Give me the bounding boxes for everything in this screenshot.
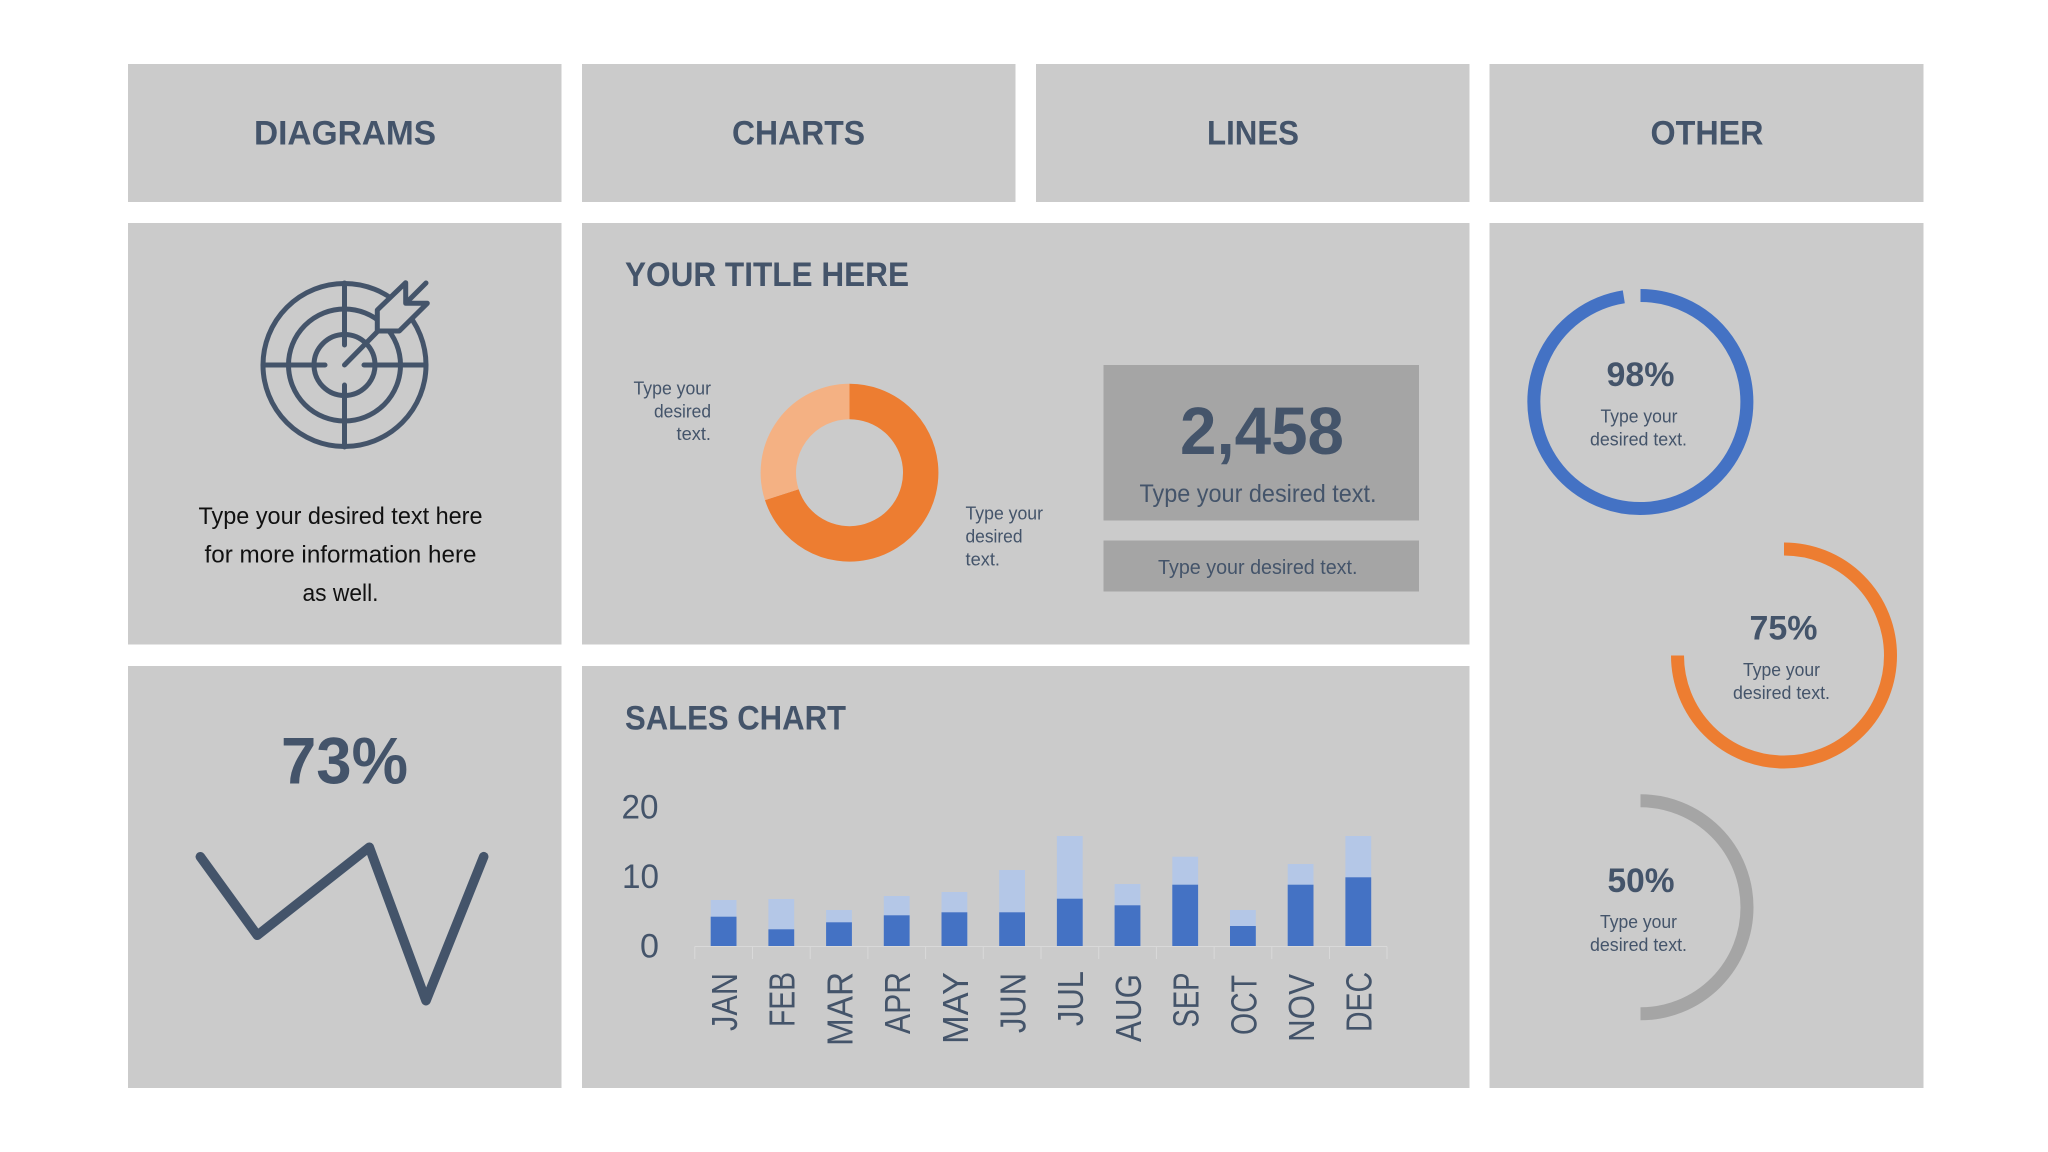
donut label: right: Type your <box>966 502 1043 524</box>
stat box: 2,458: Type your desired text. <box>1140 480 1376 508</box>
header: diagrams <box>128 64 562 202</box>
header: lines <box>1036 64 1470 202</box>
donut label: left <box>634 378 711 444</box>
x axis month labels <box>704 971 1380 1046</box>
header: lines: LINES <box>1207 114 1299 152</box>
x axis month labels: AUG <box>1108 974 1149 1042</box>
ring: 75% <box>1678 549 1890 762</box>
ring: 75%: 75% <box>1750 610 1818 648</box>
header: diagrams: DIAGRAMS <box>254 114 436 152</box>
panel: sales chart <box>582 666 1470 1088</box>
ring: 75%: desired text. <box>1733 682 1830 703</box>
metric: 73%: 73% <box>281 724 408 798</box>
stacked bar chart <box>695 836 1387 959</box>
donut label: right: text. <box>966 548 1000 570</box>
text block: target description: for more information here <box>204 542 476 568</box>
panel: 73% line <box>128 666 562 1088</box>
x axis month labels: FEB <box>762 972 803 1027</box>
x axis month labels: JUL <box>1050 971 1091 1026</box>
y axis labels: 10 <box>622 858 659 896</box>
header: charts <box>582 64 1016 202</box>
header: charts: CHARTS <box>732 114 865 152</box>
stat box: 2,458 <box>1104 365 1419 520</box>
x axis month labels: JUN <box>992 973 1034 1033</box>
text block: target description: Type your desired text here <box>198 503 482 530</box>
text block: target description: as well. <box>302 580 378 607</box>
header: other <box>1490 64 1924 202</box>
panel: target diagram <box>128 223 562 644</box>
x axis month labels: DEC <box>1339 972 1380 1032</box>
donut label: left: text. <box>676 423 711 444</box>
x axis month labels: NOV <box>1281 974 1322 1042</box>
ring: 98%: desired text. <box>1590 428 1687 450</box>
stat box: caption <box>1104 540 1419 592</box>
x axis month labels: SEP <box>1166 972 1207 1028</box>
donut label: right <box>966 502 1043 570</box>
stat box: caption: Type your desired text. <box>1158 556 1358 579</box>
panel: progress rings <box>1490 223 1924 1088</box>
x axis month labels: JAN <box>704 973 745 1031</box>
donut label: left: Type your <box>634 378 711 398</box>
x axis month labels: MAR <box>819 972 860 1046</box>
ring: 50%: 50% <box>1608 862 1674 900</box>
text block: target description <box>198 503 482 607</box>
ring: 50% <box>1590 801 1747 1014</box>
header: other: OTHER <box>1650 114 1764 152</box>
line chart <box>200 847 484 1001</box>
ring: 98% <box>1534 296 1747 508</box>
heading: your title here: YOUR TITLE HERE <box>625 256 909 294</box>
ring: 50%: desired text. <box>1590 934 1687 955</box>
x axis month labels: APR <box>877 972 918 1034</box>
ring: 98%: 98% <box>1606 356 1674 394</box>
heading: sales chart: SALES CHART <box>625 700 846 738</box>
donut chart <box>778 402 921 544</box>
y axis labels: 20 <box>622 788 658 826</box>
x axis month labels: OCT <box>1223 975 1264 1035</box>
donut label: right: desired <box>966 526 1022 546</box>
stat box: 2,458: 2,458 <box>1180 394 1344 469</box>
y axis labels <box>622 788 659 966</box>
x axis month labels: MAY <box>935 972 976 1044</box>
ring: 98%: Type your <box>1600 406 1678 426</box>
donut label: left: desired <box>654 400 711 422</box>
ring: 75%: Type your <box>1743 659 1820 680</box>
ring: 50%: Type your <box>1600 911 1677 932</box>
icon: target with arrow <box>263 283 427 447</box>
panel: your title here <box>582 223 1470 644</box>
y axis labels: 0 <box>640 928 659 966</box>
